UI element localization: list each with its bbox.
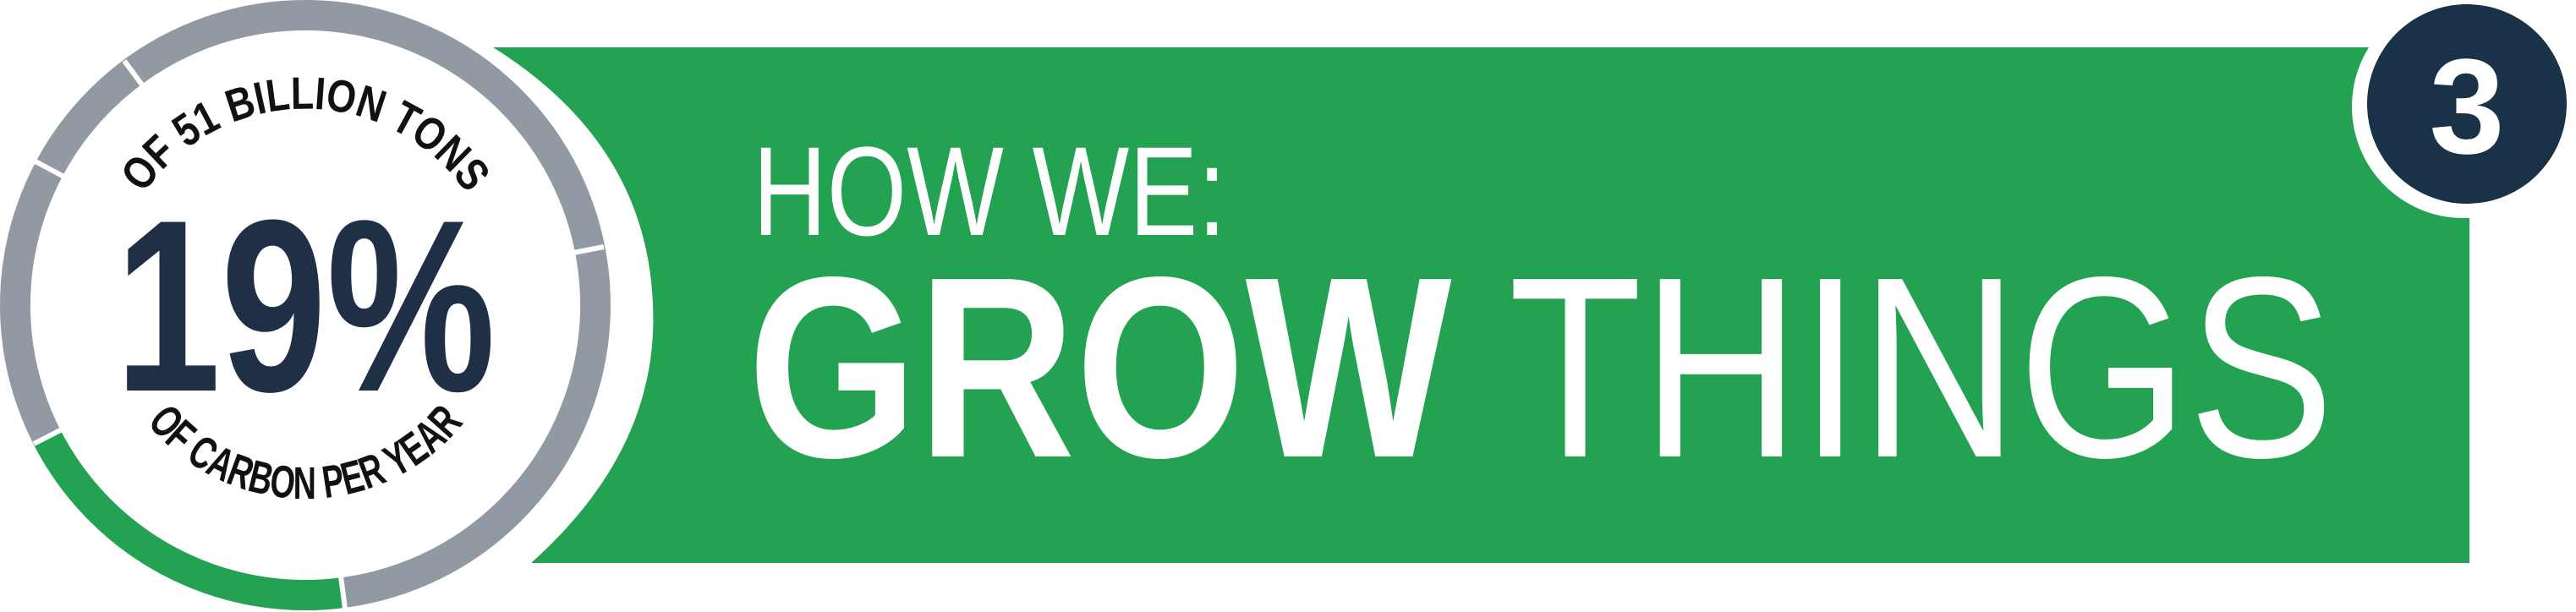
badge: number 3: 3	[2430, 30, 2504, 182]
donut chart: 19% of carbon	[0, 0, 611, 610]
green banner panel	[493, 47, 2469, 563]
curved label top: OF 51 BILLION TONS	[124, 78, 488, 189]
segment gaps	[34, 61, 604, 609]
title: grow things: GROW THINGS	[748, 223, 2334, 511]
big number: 19%	[115, 169, 496, 443]
title: how we: HOW WE:	[753, 120, 1226, 262]
curved label bottom: OF CARBON PER YEAR	[152, 406, 463, 499]
green segment	[47, 437, 341, 595]
badge: number 3	[2352, 0, 2575, 218]
